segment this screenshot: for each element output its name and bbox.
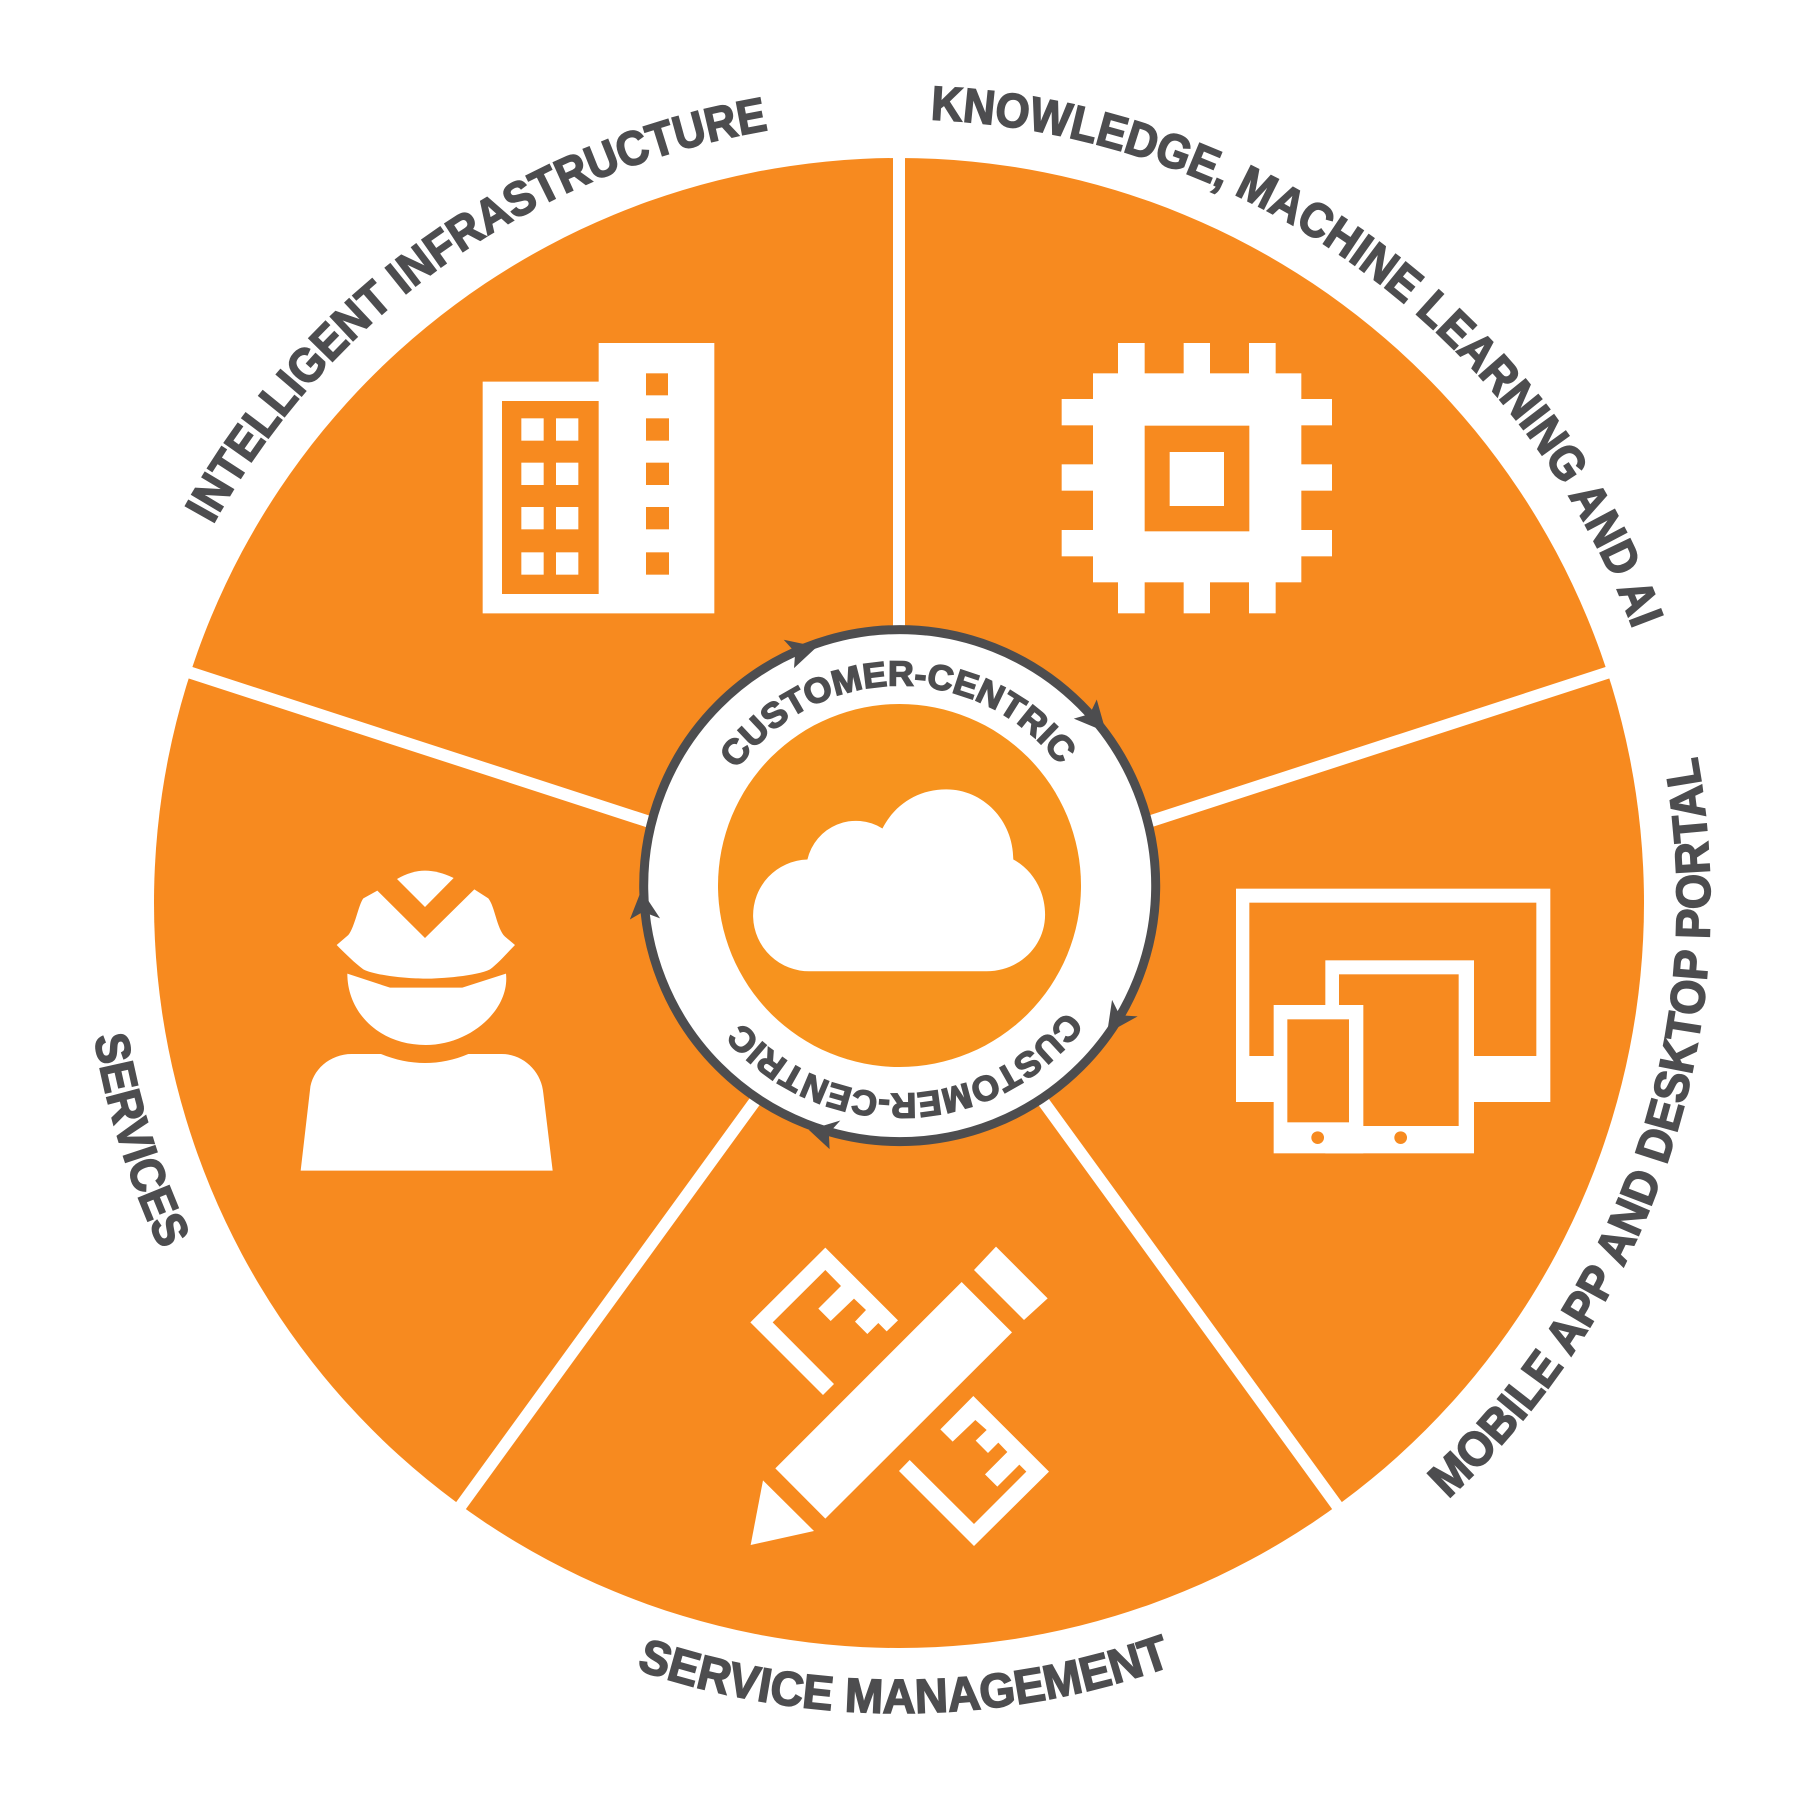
label: Knowledge, Machine Learning and AI: KNOWLEDGE, MACHINE LEARNING AND AI	[932, 86, 1664, 628]
icon: microchip	[1062, 343, 1332, 613]
label: Service Management: SERVICE MANAGEMENT	[639, 1634, 1164, 1714]
ring label: customer-centric bottom: CUSTOMER-CENTRIC	[728, 1016, 1080, 1118]
icon: buildings	[483, 343, 714, 613]
ring label: customer-centric top: CUSTOMER-CENTRIC	[722, 660, 1075, 765]
icon: monitor, tablet and phone	[1236, 889, 1550, 1153]
label: Intelligent Infrastructure: INTELLIGENT INFRASTRUCTURE	[184, 96, 768, 524]
arrowheads on ring	[630, 640, 1138, 1149]
icon: pencil and rulers	[750, 1247, 1049, 1546]
orange wheel with five segments	[154, 140, 1644, 1648]
label: Services: SERVICES	[95, 1034, 188, 1246]
icon: cloud	[753, 789, 1045, 971]
label: Mobile App and Desktop Portal: MOBILE APP AND DESKTOP PORTAL	[1426, 757, 1712, 1498]
icon: construction worker with hard hat	[301, 871, 553, 1171]
center hub	[644, 630, 1156, 1142]
